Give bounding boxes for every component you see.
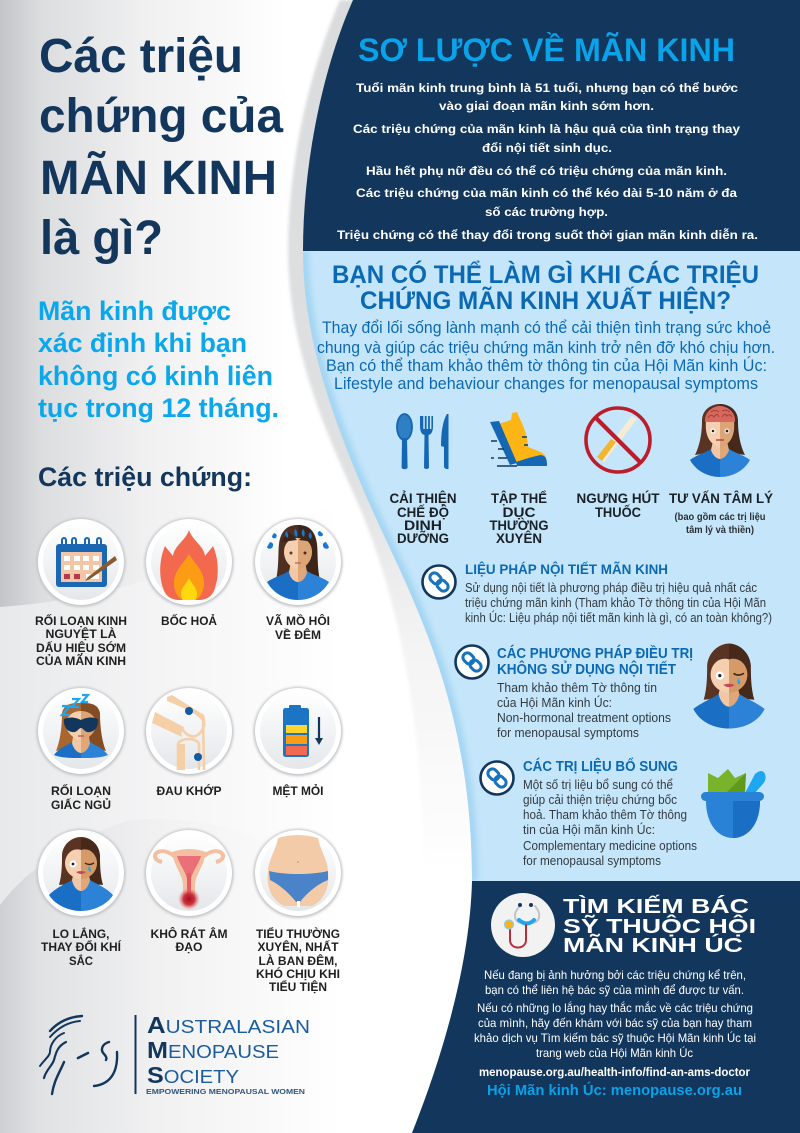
label: anxiety and mood change: [41, 926, 122, 968]
label: stop smoking: [576, 491, 660, 520]
label: diet: CHẾ ĐỘ: [397, 505, 449, 520]
label: exercise: DỤC: [502, 505, 536, 520]
text: complementary therapies: Complementary medicine options: [523, 839, 697, 853]
action: diet: [390, 414, 456, 546]
heading: non-hormonal treatment: KHÔNG SỬ DỤNG NỘI TIẾT: [497, 660, 676, 678]
heading: what you can do: BẠN CÓ THỂ LÀM GÌ KHI CÁC TRIỆU: [332, 259, 759, 289]
logo: Australasian Menopause Society: [40, 1012, 310, 1096]
label: urinary frequency: TIỂU THƯỜNG: [256, 926, 340, 941]
text: lifestyle intro: Lifestyle and behaviour changes for menopausal symptoms: [334, 375, 758, 393]
symptom: night sweats: [254, 518, 342, 607]
label: vaginal dryness: ĐẠO: [176, 940, 202, 954]
text: find a doctor advice: bạn có thể liên hệ bác sỹ của mình để được tư vấn.: [485, 983, 744, 997]
label: exercise: THƯỜNG: [490, 518, 548, 533]
icon: woman with brain: [690, 404, 750, 477]
label: stop smoking: NGƯNG HÚT: [576, 491, 660, 506]
text: complementary therapies: Một số trị liệu bổ sung có thể: [523, 778, 673, 792]
panel: navy overview background: [303, 0, 800, 251]
label: night sweats: VỀ ĐÊM: [275, 627, 321, 642]
action: counselling: [669, 404, 773, 536]
title: là gì?: [40, 212, 163, 265]
heading: non-hormonal treatment: [497, 645, 693, 678]
text: complementary therapies: hoả. Tham khảo thêm Tờ thông: [523, 808, 687, 822]
heading: what you can do: CHỨNG MÃN KINH XUẤT HIỆN?: [360, 285, 731, 315]
label: diet: [390, 491, 456, 546]
heading: find an AMS doctor: MÃN KINH ÚC: [563, 933, 743, 957]
label: counselling: TƯ VẤN TÂM LÝ: [669, 491, 773, 506]
label: sleep disturbance: [51, 783, 111, 812]
text: complementary therapies: for menopausal symptoms: [523, 854, 661, 868]
title: MÃN KINH: [40, 150, 277, 205]
heading: find an AMS doctor: TÌM KIẾM BÁC: [563, 895, 749, 918]
heading: hormone therapy: LIỆU PHÁP NỘI TIẾT MÃN KINH: [465, 562, 668, 577]
label: urinary frequency: XUYÊN, NHẤT: [258, 939, 339, 954]
title: Các triệu: [39, 30, 243, 83]
text: lifestyle intro: Thay đổi lối sống lành mạnh có thể cải thiện tình trạng sức khoẻ: [322, 319, 771, 337]
icon: sleeping woman with eye mask: [54, 695, 108, 758]
section: complementary therapies: [480, 757, 766, 868]
text: non-hormonal treatment: for menopausal symptoms: [497, 726, 639, 740]
subtitle: definition of menopause: [38, 296, 279, 423]
text: find a doctor advice: trang web của Hội Mãn kinh Úc: [536, 1045, 693, 1060]
link: society website: Hội Mãn kinh Úc: menopause.org.au: [487, 1081, 742, 1099]
text: non-hormonal treatment: Tham khảo thêm Tờ thông tin: [497, 681, 657, 695]
text: find a doctor advice: của mình, hãy đến khám với bác sỹ của bạn hay tham: [478, 1016, 752, 1030]
icon: uterus: [155, 849, 223, 910]
label: diet: DINH: [404, 518, 442, 533]
text: hormone therapy: Sử dụng nội tiết là phương pháp điều trị hiệu quả nhất các: [465, 581, 757, 595]
text: overview facts: Triệu chứng có thể thay đổi trong suốt thời gian mãn kinh diễn ra.: [337, 227, 758, 242]
label: irregular periods: RỐI LOẠN KINH: [35, 613, 127, 628]
action: stop smoking: [576, 408, 660, 520]
text: lifestyle intro: chung và giúp các triệu chứng mãn kinh trở nên đỡ khó chịu hơn.: [317, 339, 775, 357]
heading: find an AMS doctor: SỸ THUỘC HỘI: [563, 914, 756, 938]
label: anxiety and mood change: THAY ĐỔI KHÍ: [41, 939, 122, 954]
symptom: joint pain: [144, 687, 234, 776]
label: exercise: [490, 491, 548, 546]
label: stop smoking: THUỐC: [595, 505, 641, 520]
label: night sweats: [266, 613, 330, 642]
text: find a doctor advice: Nếu đang bị ảnh hưởng bởi các triệu chứng kể trên,: [484, 968, 746, 982]
text: complementary therapies: giúp cải thiện triệu chứng bốc: [523, 793, 677, 807]
icon: stethoscope: [491, 893, 555, 957]
label: anxiety and mood change: LO LẮNG,: [52, 926, 110, 941]
text: lifestyle intro: [317, 319, 775, 393]
logo: Australasian Menopause Society: AUSTRALASIAN: [147, 1012, 310, 1038]
symptom: hot flush: [144, 518, 234, 607]
text: overview facts: Tuổi mãn kinh trung bình là 51 tuổi, nhưng bạn có thể bước: [356, 81, 738, 95]
label: urinary frequency: TIỂU TIỆN: [269, 979, 327, 994]
text: complementary therapies: tin của Hội mãn kinh Úc:: [523, 822, 655, 837]
icon: flame: [160, 530, 218, 600]
text: hormone therapy: triệu chứng mãn kinh (Tham khảo Tờ thông tin của Hội Mãn: [465, 596, 766, 610]
link: find a doctor url: menopause.org.au/health-info/find-an-ams-doctor: [479, 1065, 750, 1079]
note: counselling detail: tâm lý và thiền): [686, 524, 754, 536]
symptom: irregular periods: [36, 518, 126, 607]
label: diet: CẢI THIỆN: [390, 491, 456, 506]
icon: knee joint: [152, 695, 206, 770]
heading: complementary therapies: CÁC TRỊ LIỆU BỔ SUNG: [523, 757, 678, 775]
symptom: fatigue: [254, 687, 342, 776]
text: non-hormonal treatment: [497, 681, 671, 740]
text: overview facts: [337, 81, 758, 242]
icon: logo profile: [40, 1016, 117, 1094]
logo: Australasian Menopause Society: MENOPAUSE: [147, 1037, 279, 1063]
section: non-hormonal treatment: [456, 643, 765, 740]
icon: sweating woman: [267, 525, 329, 600]
text: lifestyle intro: Bạn có thể tham khảo thêm tờ thông tin của Hội Mãn kinh Úc:: [326, 356, 767, 375]
heading: symptoms: Các triệu chứng:: [38, 462, 252, 492]
heading: non-hormonal treatment: CÁC PHƯƠNG PHÁP ĐIỀU TRỊ: [497, 645, 693, 662]
label: exercise: TẬP THỂ: [491, 491, 547, 506]
label: sleep disturbance: RỐI LOẠN: [51, 783, 111, 798]
text: find a doctor advice: [474, 968, 756, 1060]
icon: link: [422, 566, 456, 598]
logo: Australasian Menopause Society: EMPOWERING MENOPAUSAL WOMEN: [146, 1087, 305, 1096]
text: overview facts: đổi nội tiết sinh dục.: [482, 141, 612, 155]
note: counselling detail: [674, 511, 766, 536]
symptom: sleep disturbance: [36, 687, 126, 776]
subtitle: definition of menopause: không có kinh liên: [38, 361, 273, 391]
text: overview facts: Các triệu chứng của mãn kinh là hậu quả của tình trạng thay: [353, 122, 740, 136]
label: hot flush: BỐC HOẢ: [161, 613, 217, 628]
symptom: vaginal dryness: [144, 829, 234, 918]
label: fatigue: MỆT MỎI: [272, 783, 324, 798]
label: joint pain: ĐAU KHỚP: [156, 783, 222, 798]
text: hormone therapy: kinh Úc: Liệu pháp nội tiết mãn kinh là gì, có an toàn không?): [465, 610, 772, 625]
title: [39, 30, 283, 265]
text: non-hormonal treatment: của Hội Mãn kinh Úc:: [497, 695, 612, 710]
label: irregular periods: CỦA MÃN KINH: [36, 653, 126, 668]
text: hormone therapy: [465, 581, 772, 625]
label: urinary frequency: [256, 926, 340, 994]
icon: low battery: [283, 705, 323, 757]
subtitle: definition of menopause: tục trong 12 tháng.: [38, 393, 279, 423]
label: exercise: XUYÊN: [496, 531, 542, 546]
icon: running shoe: [490, 412, 547, 466]
subtitle: definition of menopause: xác định khi bạn: [38, 328, 247, 358]
label: vaginal dryness: KHÔ RÁT ÂM: [150, 926, 228, 941]
subtitle: definition of menopause: Mãn kinh được: [38, 296, 231, 326]
label: irregular periods: NGUYỆT LÀ: [46, 626, 117, 641]
text: find a doctor advice: Nếu có những lo lắng hay thắc mắc về các triệu chứng: [477, 1000, 753, 1015]
label: sleep disturbance: GIẤC NGỦ: [51, 797, 111, 812]
title: chứng của: [39, 90, 283, 143]
label: urinary frequency: LÀ BAN ĐÊM,: [258, 953, 338, 968]
icon: herbs in a mortar: [701, 769, 766, 838]
label: vaginal dryness: [150, 926, 228, 954]
icon: torso and underwear: [268, 835, 328, 907]
label: diet: DƯỠNG: [397, 531, 449, 546]
action: exercise: [490, 412, 548, 546]
icon: crying woman: [693, 643, 765, 729]
symptom: anxiety and mood change: [36, 829, 126, 918]
heading: find an AMS doctor: [563, 895, 756, 957]
label: irregular periods: DẤU HIỆU SỚM: [36, 640, 126, 655]
text: overview facts: Hầu hết phụ nữ đều có thể có triệu chứng của mãn kinh.: [366, 164, 727, 178]
icon: no smoking: [586, 408, 650, 472]
label: irregular periods: [35, 613, 127, 668]
text: overview facts: số các trường hợp.: [485, 205, 608, 219]
label: anxiety and mood change: SẮC: [69, 953, 93, 968]
icon: crying woman: [49, 837, 113, 911]
text: overview facts: Các triệu chứng của mãn kinh có thể kéo dài 5-10 năm ở đa: [356, 186, 737, 200]
panel: navy find a doctor background: [412, 881, 800, 1133]
icon: spoon, fork and knife: [397, 414, 448, 469]
heading: what you can do: [332, 259, 759, 315]
text: find a doctor advice: khảo dịch vụ Tìm kiếm bác sỹ thuộc Hội Mãn kinh Úc tại: [474, 1030, 756, 1045]
logo: Australasian Menopause Society: SOCIETY: [147, 1062, 239, 1088]
section: menopausal hormone therapy: [422, 562, 772, 625]
symptom: urinary frequency: [254, 829, 342, 918]
icon: link: [480, 762, 514, 794]
label: night sweats: VÃ MỒ HÔI: [266, 613, 330, 628]
note: counselling detail: (bao gồm các trị liệu: [674, 511, 766, 523]
text: non-hormonal treatment: Non-hormonal treatment options: [497, 711, 671, 725]
panel: light blue actions background: [303, 251, 800, 881]
icon: link: [456, 646, 488, 678]
heading: menopause overview: SƠ LƯỢC VỀ MÃN KINH: [358, 32, 735, 68]
text: complementary therapies: [523, 778, 697, 868]
icon: calendar: [56, 538, 117, 587]
label: urinary frequency: KHÓ CHỊU KHI: [256, 966, 340, 981]
text: overview facts: vào giai đoạn mãn kinh sớm hơn.: [439, 99, 654, 113]
